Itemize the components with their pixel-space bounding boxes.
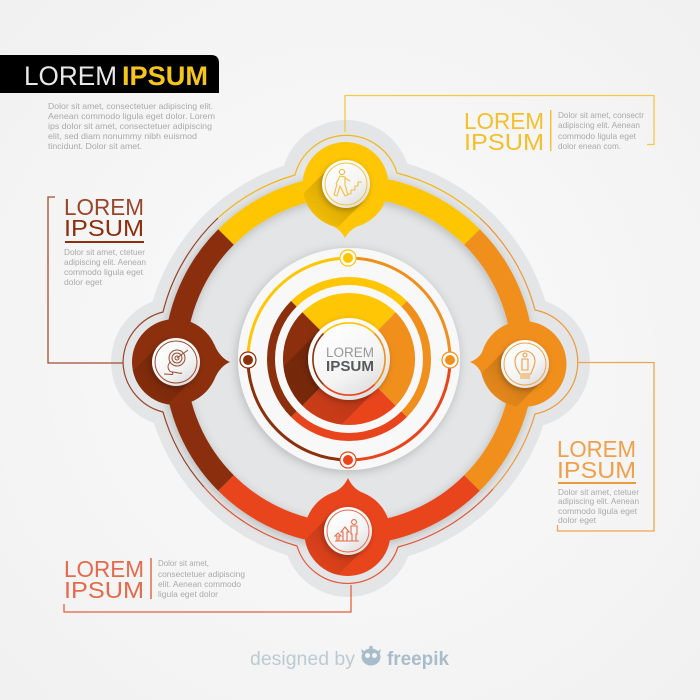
callout: brown: IPSUM	[64, 215, 144, 241]
callout: red	[64, 556, 351, 612]
header banner	[0, 55, 219, 93]
watermark: designed by	[250, 649, 356, 670]
intro text: Aenean commodo ligula eget dolor. Lorem	[48, 112, 215, 121]
callout: orange: dolor eget	[558, 516, 597, 525]
center label	[326, 345, 374, 375]
callout: orange	[557, 362, 654, 531]
icon: person beside rising arrows	[335, 520, 359, 541]
callout: red: IPSUM	[64, 577, 144, 603]
callout: orange: IPSUM	[557, 457, 636, 483]
callout: yellow: adipiscing elit. Aenean	[558, 121, 640, 130]
outer thin ring with nodes	[240, 250, 458, 468]
callout: orange: Dolor sit amet, ctetuer	[558, 488, 639, 497]
center button	[308, 318, 390, 400]
icon: freepik mascot	[361, 646, 381, 666]
header banner: LOREM	[24, 61, 117, 91]
callout: brown: dolor eget	[64, 278, 103, 287]
node dot: right	[442, 352, 458, 368]
callout: orange: commodo ligula eget	[558, 507, 638, 516]
callout: red: elit. Aenean commodo	[158, 580, 241, 589]
header banner: IPSUM	[122, 61, 208, 91]
icon: target and archer	[164, 350, 188, 374]
thin outline around diagram	[123, 135, 578, 583]
callout: orange: adipiscing elit. Aenean	[558, 497, 639, 506]
callout: yellow: dolor enean com.	[558, 142, 621, 151]
callout: red: ligula eget dolor	[158, 590, 218, 599]
central white disc	[238, 248, 460, 470]
callout: red: LOREM	[64, 556, 144, 582]
callout: orange: LOREM	[557, 436, 636, 462]
node: right orange	[470, 322, 566, 407]
pie chart	[282, 293, 416, 425]
intro text	[48, 102, 215, 151]
callout: brown: adipiscing elit. Aenean	[64, 258, 146, 267]
callout: brown: commodo ligula eget	[64, 268, 144, 277]
node: top yellow	[302, 142, 388, 238]
node: left brown	[132, 320, 230, 404]
callout: yellow	[345, 96, 654, 155]
callout: brown	[48, 194, 146, 363]
node dot: left	[240, 352, 256, 368]
center label: LOREM	[326, 345, 374, 360]
callout: brown: LOREM	[64, 194, 144, 220]
intro text: ips dolor sit amet, consectetuer adipiscing	[48, 122, 212, 131]
middle segmented ring	[271, 281, 427, 437]
intro text: elit, sed diam nonummy nibh euismod	[48, 132, 197, 141]
intro text: Dolor sit amet, consectetuer adipiscing elit.	[48, 102, 213, 111]
node dot: bottom	[340, 452, 356, 468]
icon: person climbing stairs	[334, 169, 362, 196]
center label: IPSUM	[326, 359, 374, 375]
big segmented ring	[175, 186, 523, 534]
watermark: freepik	[387, 649, 449, 670]
callout: yellow: IPSUM	[464, 129, 544, 155]
callout: red: Dolor sit amet,	[158, 559, 209, 568]
gray halo behind diagram	[111, 120, 590, 597]
callout: brown: Dolor sit amet, ctetuer	[64, 248, 145, 257]
callout: yellow: commodo ligula eget	[558, 132, 637, 141]
intro text: tincidunt. Dolor sit amet.	[48, 142, 142, 151]
callout: yellow: Dolor sit amet, consectr	[558, 111, 644, 120]
callout: red: consectetuer adipiscing	[158, 570, 245, 579]
watermark	[250, 646, 449, 670]
node: bottom red	[305, 478, 390, 576]
node dot: top	[340, 250, 356, 266]
icon: light bulb with person	[515, 351, 535, 378]
callout: yellow: LOREM	[464, 108, 544, 134]
